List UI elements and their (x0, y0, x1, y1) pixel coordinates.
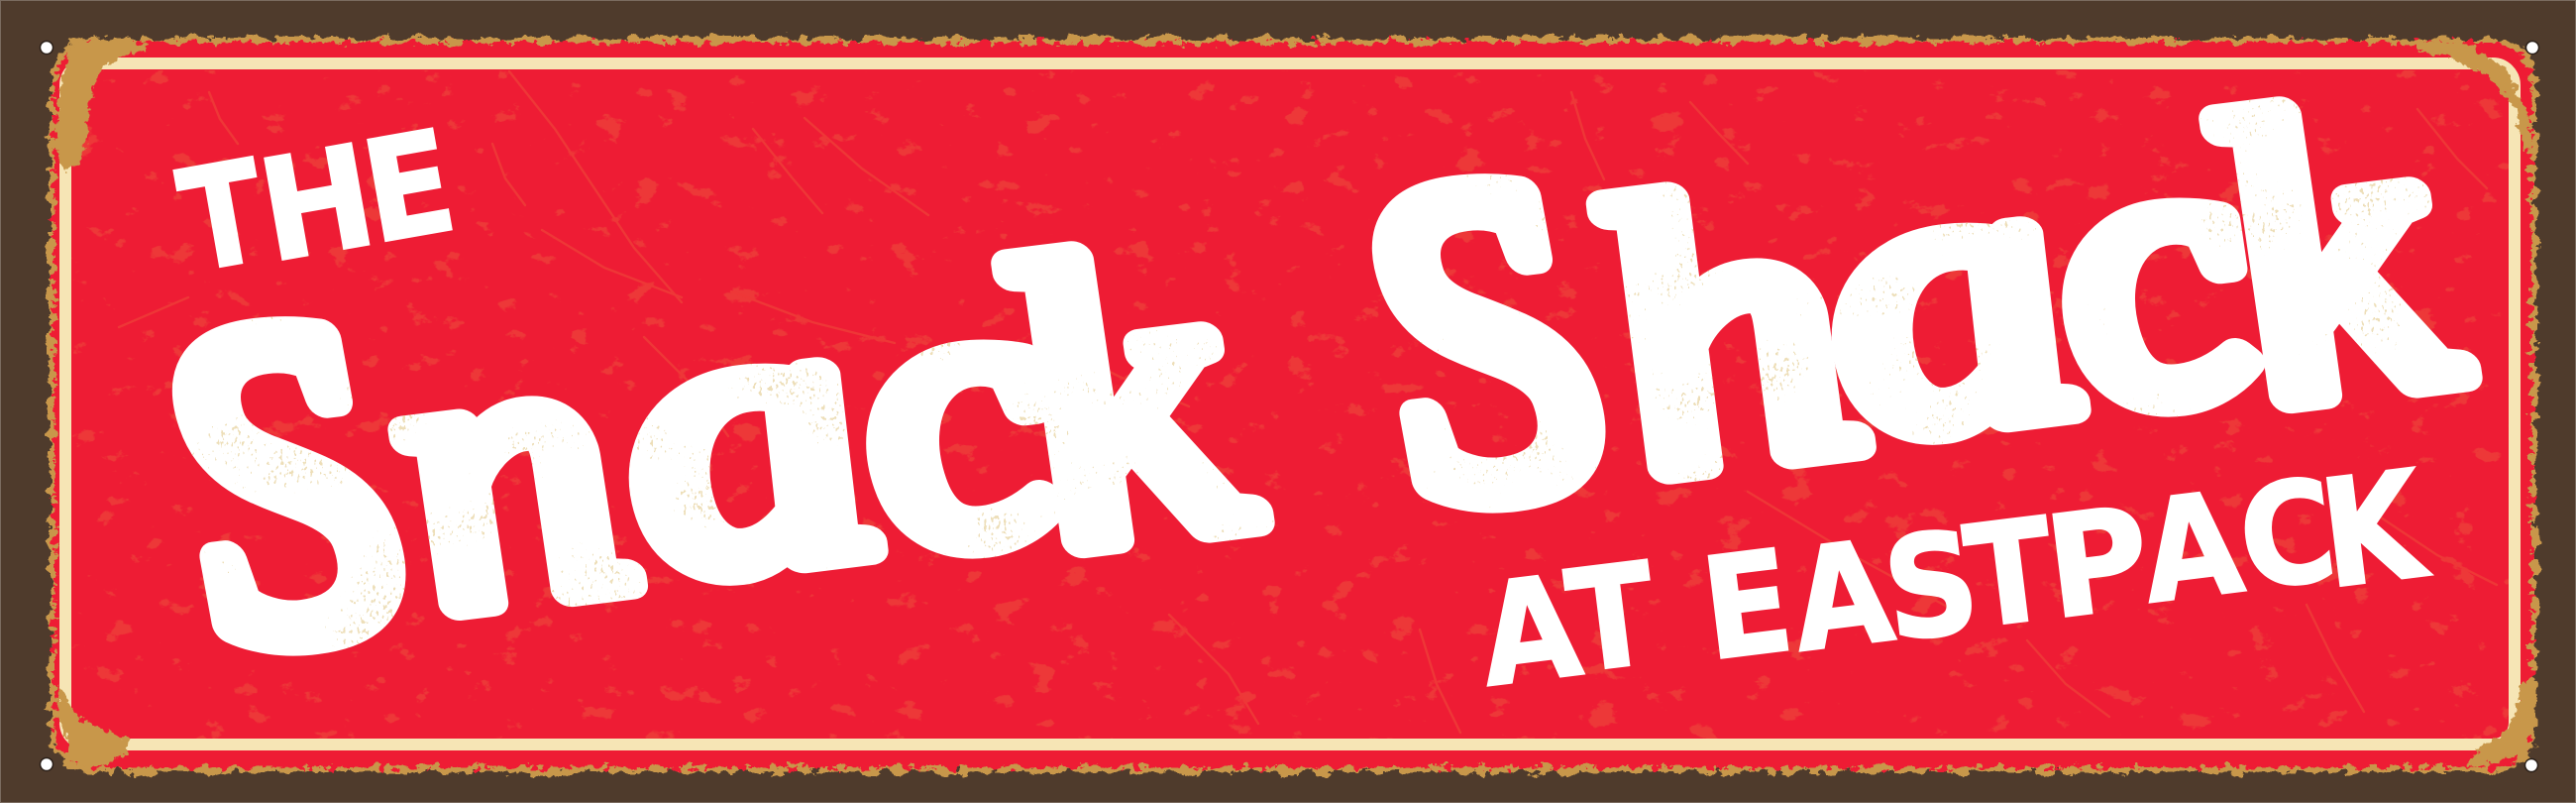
heading word: Snack: k (947, 168, 1300, 628)
heading word: THE: E (352, 100, 467, 277)
heading word: Snack: S (96, 228, 459, 736)
heading line: AT EASTPACK: A (2133, 461, 2251, 635)
scratches (119, 71, 2497, 733)
heading word: Shack (1296, 23, 2508, 593)
heading line: AT EASTPACK: A (1783, 510, 1901, 684)
heading word: Snack: n (327, 248, 677, 688)
heading word: Shack: h (1537, 110, 1905, 552)
heading word: Shack: k (2155, 23, 2508, 483)
worn corner: bottom right (2467, 679, 2536, 767)
heading word: Snack (96, 168, 1300, 736)
worn corner: top left (55, 40, 149, 173)
heading line: AT EASTPACK: S (1876, 501, 1987, 674)
heading word: THE: T (168, 130, 276, 305)
heading line: AT EASTPACK: P (2037, 477, 2158, 651)
heading line: AT EASTPACK: E (1694, 520, 1801, 693)
heading word: THE: H (248, 113, 386, 294)
heading word: Snack: a (547, 213, 925, 655)
heading word: Shack: a (1750, 72, 2128, 515)
heading line: AT EASTPACK: T (1558, 531, 1664, 705)
heading line: AT EASTPACK: A (1471, 544, 1589, 719)
faded red blotch texture (71, 70, 2509, 739)
worn corner: bottom left (57, 684, 129, 769)
heading line: AT EASTPACK: K (2312, 439, 2436, 623)
heading word: Shack: S (1296, 85, 1659, 593)
worn corner: top right (2417, 42, 2532, 149)
heading word: Shack: c (1981, 50, 2311, 488)
heading line: AT EASTPACK (1471, 439, 2436, 719)
heading word: THE (168, 100, 467, 305)
heading word: Snack: c (785, 191, 1116, 630)
heading line: AT EASTPACK: T (1957, 487, 2063, 660)
heading line: AT EASTPACK: C (2230, 449, 2344, 623)
